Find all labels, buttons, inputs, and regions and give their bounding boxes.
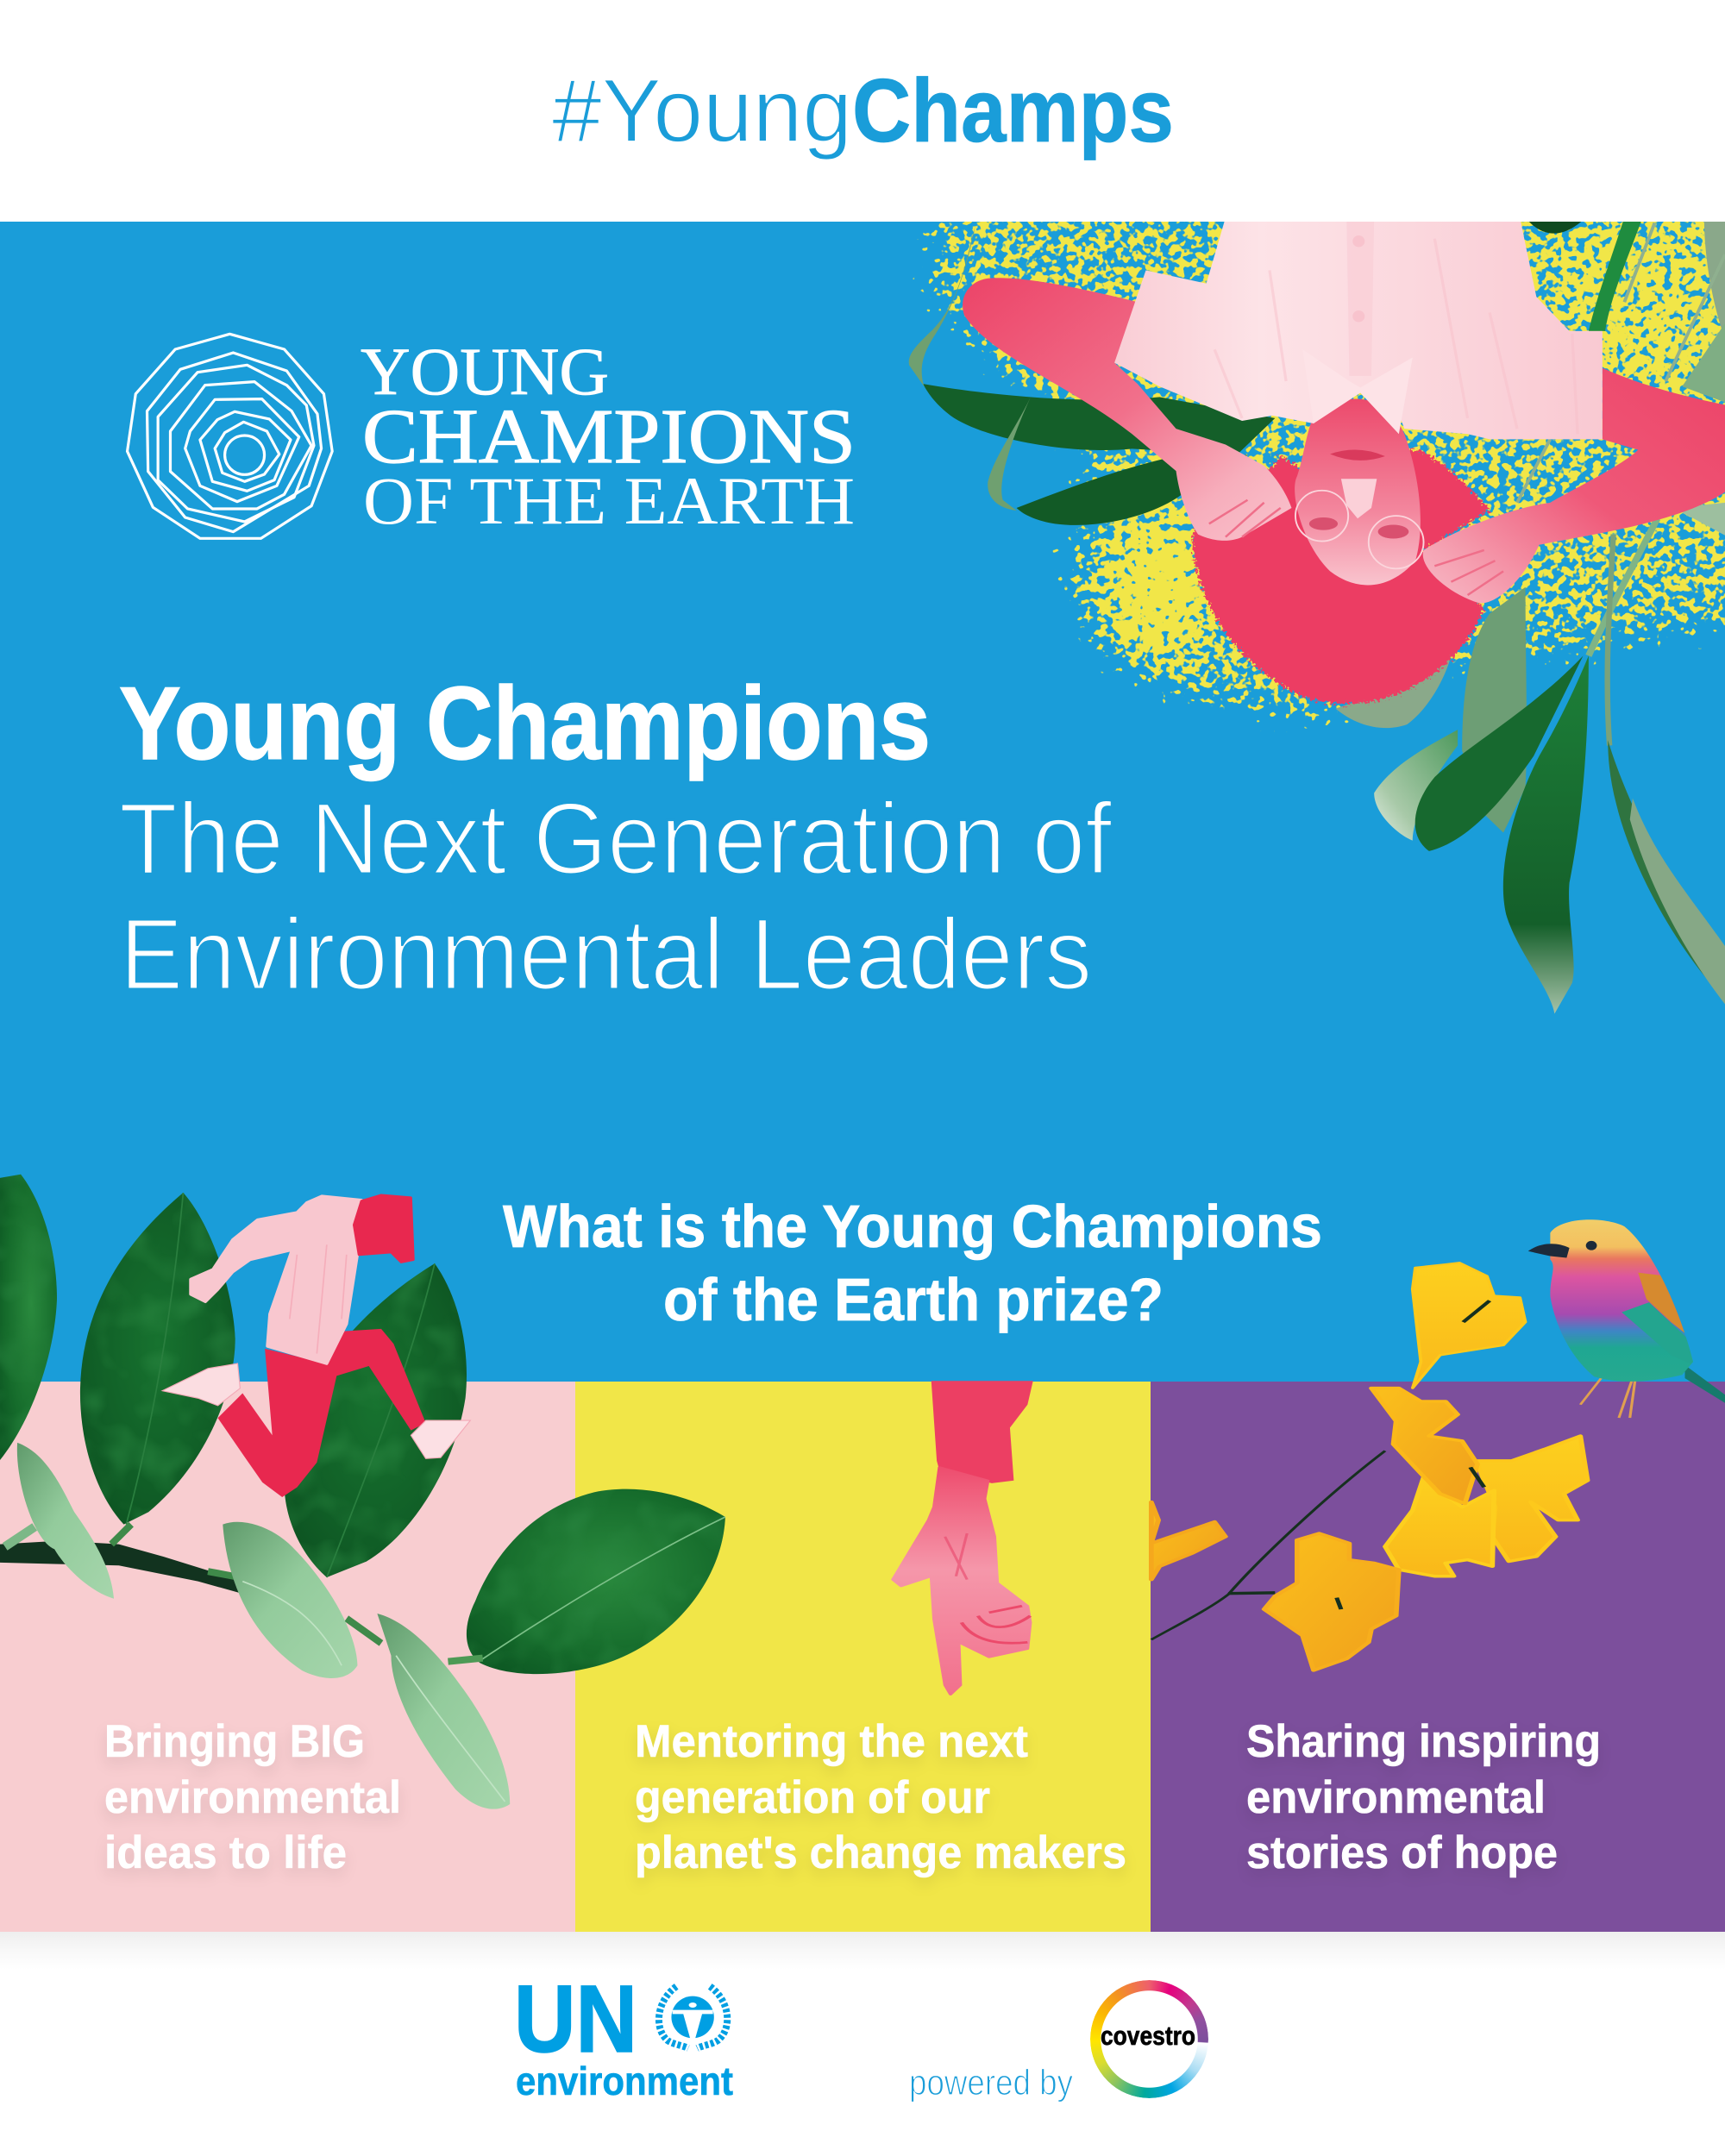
logo: UN environment: environment bbox=[516, 2059, 733, 2103]
title: #YoungChamps bbox=[552, 61, 1174, 161]
card text: Sharing inspiring environmental stories of hope: Sharing inspiring bbox=[1246, 1716, 1601, 1767]
figure: hair bbox=[1193, 449, 1490, 704]
icon: bird bbox=[1528, 1217, 1725, 1418]
logo wordmark bbox=[361, 334, 856, 538]
illustration: leaves branch with jumping person bbox=[0, 1175, 725, 1809]
heading: What is the Young Champions of the Earth prize? bbox=[503, 1193, 1322, 1333]
card text: Bringing BIG environmental ideas to life: environmental bbox=[104, 1772, 401, 1823]
heading: The Next Generation of Environmental Leaders: Environmental Leaders bbox=[120, 898, 1092, 1012]
panel: blue hero background bbox=[0, 222, 1725, 1382]
icon: concentric tree rings bbox=[128, 334, 332, 538]
logo wordmark: OF THE EARTH bbox=[363, 463, 855, 538]
twig bbox=[1151, 1451, 1385, 1639]
leaf veins bbox=[126, 1193, 725, 1660]
heading: Young Champions: Young Champions bbox=[119, 666, 931, 781]
footer shadow bbox=[0, 1932, 1725, 1970]
card text: Bringing BIG environmental ideas to life bbox=[104, 1716, 401, 1878]
logo: UN environment bbox=[514, 1966, 733, 2103]
panel: purple card bbox=[1151, 1382, 1725, 1932]
icon: covestro ring bbox=[1090, 1980, 1208, 2098]
logo: covestro: covestro bbox=[1101, 2021, 1195, 2051]
card text: Mentoring the next generation: Mentoring the next bbox=[635, 1716, 1028, 1767]
card text: Bringing BIG environmental ideas to life: ideas to life bbox=[104, 1827, 347, 1878]
logo wordmark: CHAMPIONS bbox=[362, 394, 856, 479]
card text: Bringing BIG environmental ideas to life: Bringing BIG bbox=[104, 1716, 365, 1767]
green leaves bbox=[0, 1175, 725, 1674]
card text: Mentoring the next generation: generation of our bbox=[635, 1772, 990, 1823]
heading: The Next Generation of Environmental Leaders: The Next Generation of bbox=[119, 782, 1112, 896]
icon: UN emblem bbox=[659, 1986, 727, 2048]
panel: yellow card bbox=[575, 1382, 1151, 1932]
card text: Sharing inspiring environmental stories of hope: environmental bbox=[1246, 1772, 1546, 1823]
card text: Sharing inspiring environmental stories of hope: stories of hope bbox=[1246, 1827, 1558, 1878]
branch bbox=[0, 1525, 483, 1662]
card text: Mentoring the next generation bbox=[635, 1716, 1126, 1878]
panel: pink card bbox=[0, 1382, 575, 1932]
card text: Mentoring the next generation: planet's change makers bbox=[635, 1827, 1126, 1878]
logo: UN environment: UN bbox=[514, 1966, 637, 2072]
figure: right arm and hand bbox=[1423, 368, 1725, 603]
heading: The Next Generation of Environmental Leaders bbox=[119, 782, 1112, 1012]
figure: left arm and hand bbox=[963, 278, 1291, 541]
title: #YoungChamps: Champs bbox=[852, 61, 1174, 161]
figure: shirt bbox=[1114, 217, 1603, 439]
heading: What is the Young Champions of the Earth prize?: of the Earth prize? bbox=[663, 1266, 1164, 1333]
text: powered by: powered by bbox=[909, 2062, 1073, 2103]
figure: jumping person bbox=[162, 1195, 470, 1497]
background leaves bbox=[909, 217, 1725, 1013]
heading: What is the Young Champions of the Earth prize?: What is the Young Champions bbox=[503, 1193, 1322, 1260]
logo: covestro bbox=[1090, 1980, 1208, 2098]
illustration: hand, ginkgo branch and bird bbox=[893, 1217, 1725, 1695]
figure: pointing hand bbox=[893, 1381, 1033, 1695]
title: #YoungChamps: #Young bbox=[552, 61, 852, 161]
logo wordmark: YOUNG bbox=[361, 334, 609, 409]
ginkgo leaves bbox=[1151, 1263, 1588, 1670]
logo: Young Champions of the Earth bbox=[128, 334, 856, 538]
figure: face bbox=[1295, 399, 1424, 585]
pale leaves bbox=[17, 1443, 510, 1809]
card text: Sharing inspiring environmental stories of hope bbox=[1246, 1716, 1601, 1878]
illustration: upside-down person with leaves and paint splatter bbox=[909, 175, 1725, 1013]
paint splatter bbox=[912, 175, 1725, 735]
